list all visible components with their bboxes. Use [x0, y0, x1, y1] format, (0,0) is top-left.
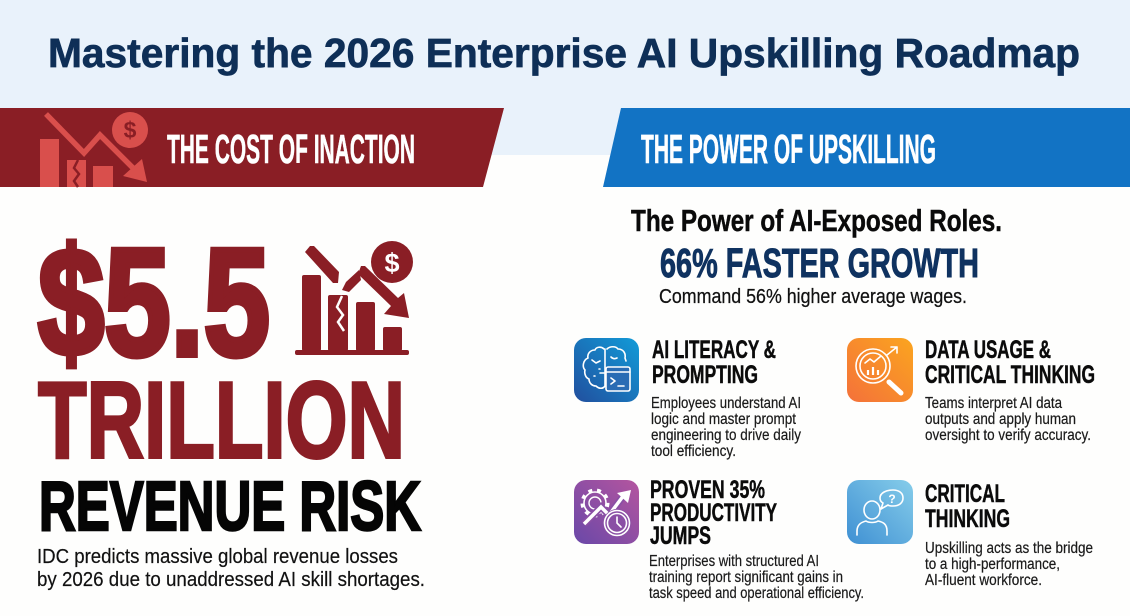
heading: proven 35% productivity jumps [650, 476, 777, 550]
subheading: the power of AI-exposed roles: The Power of AI-Exposed Roles. [631, 203, 1002, 238]
icon: broken falling bar chart [295, 241, 413, 355]
heading: the cost of inaction: THE COST OF INACTION [167, 126, 415, 172]
text: critical thinking description: to a high-performance, [925, 556, 1060, 573]
icon: magnifier over chart [847, 338, 913, 402]
text: AI literacy description: logic and master prompt [651, 411, 797, 428]
text: higher wages: Command 56% higher average wages. [659, 285, 967, 308]
title: Mastering the 2026 Enterprise AI Upskilling Roadmap [48, 30, 1080, 76]
panel: revenue risk statistic [37, 217, 425, 591]
text: productivity description: Enterprises with structured AI [649, 553, 819, 570]
text: productivity description: task speed and operational efficiency. [649, 585, 864, 602]
text: data usage description: Teams interpret AI data [925, 395, 1062, 412]
icon: falling chart with dollar coin [40, 112, 148, 187]
big number: $5.5: $5.5 [38, 217, 270, 388]
text: AI literacy description [651, 395, 801, 460]
heading: proven 35% productivity jumps: JUMPS [650, 522, 711, 550]
heading: AI literacy and prompting: AI LITERACY & [652, 336, 776, 364]
text: critical thinking description: AI-fluent workforce. [925, 572, 1042, 589]
stat: 66% faster growth: 66% FASTER GROWTH [660, 240, 979, 286]
icon: gear, rising arrow and clock [574, 480, 639, 544]
icon: person with question bubble: ? [888, 492, 896, 506]
text: data usage description: outputs and apply human [925, 411, 1076, 428]
text: trillion: TRILLION [38, 360, 405, 482]
card: proven productivity jumps [574, 476, 864, 602]
text: productivity description [649, 553, 864, 602]
heading: AI literacy and prompting [652, 336, 776, 389]
text: data usage description: oversight to verify accuracy. [925, 427, 1091, 444]
heading: data usage and critical thinking: DATA USAGE & [925, 336, 1051, 364]
icon: falling chart with dollar coin: $ [124, 117, 137, 143]
text: revenue risk: REVENUE RISK [39, 467, 421, 545]
heading: data usage and critical thinking [925, 336, 1095, 389]
text: productivity description: training report significant gains in [649, 569, 843, 586]
icon: brain and terminal [574, 338, 639, 402]
icon: person with question bubble [847, 480, 913, 544]
card: data usage and critical thinking [847, 336, 1095, 444]
text: revenue risk description: IDC predicts massive global revenue losses [37, 545, 398, 568]
heading: proven 35% productivity jumps: PRODUCTIVITY [650, 499, 777, 527]
heading: proven 35% productivity jumps: PROVEN 35% [650, 476, 765, 504]
text: data usage description [925, 395, 1091, 444]
text: AI literacy description: engineering to drive daily [651, 427, 801, 444]
card: critical thinking [847, 480, 1093, 589]
heading: critical thinking: THINKING [925, 505, 1010, 533]
text: revenue risk description [37, 545, 425, 591]
card: AI literacy and prompting [574, 336, 801, 460]
panel: the power of upskilling banner [603, 108, 1130, 187]
text: critical thinking description [925, 540, 1093, 589]
text: revenue risk description: by 2026 due to unaddressed AI skill shortages. [37, 568, 425, 591]
panel: AI-exposed roles summary [631, 203, 1002, 308]
panel: the cost of inaction banner [0, 108, 504, 187]
text: critical thinking description: Upskilling acts as the bridge [925, 540, 1093, 557]
text: AI literacy description: Employees understand AI [651, 395, 801, 412]
text: AI literacy description: tool efficiency. [651, 443, 736, 460]
heading: critical thinking: CRITICAL [925, 480, 1005, 508]
heading: critical thinking [925, 480, 1010, 533]
icon: broken falling bar chart: $ [384, 248, 400, 278]
heading: AI literacy and prompting: PROMPTING [652, 361, 758, 389]
